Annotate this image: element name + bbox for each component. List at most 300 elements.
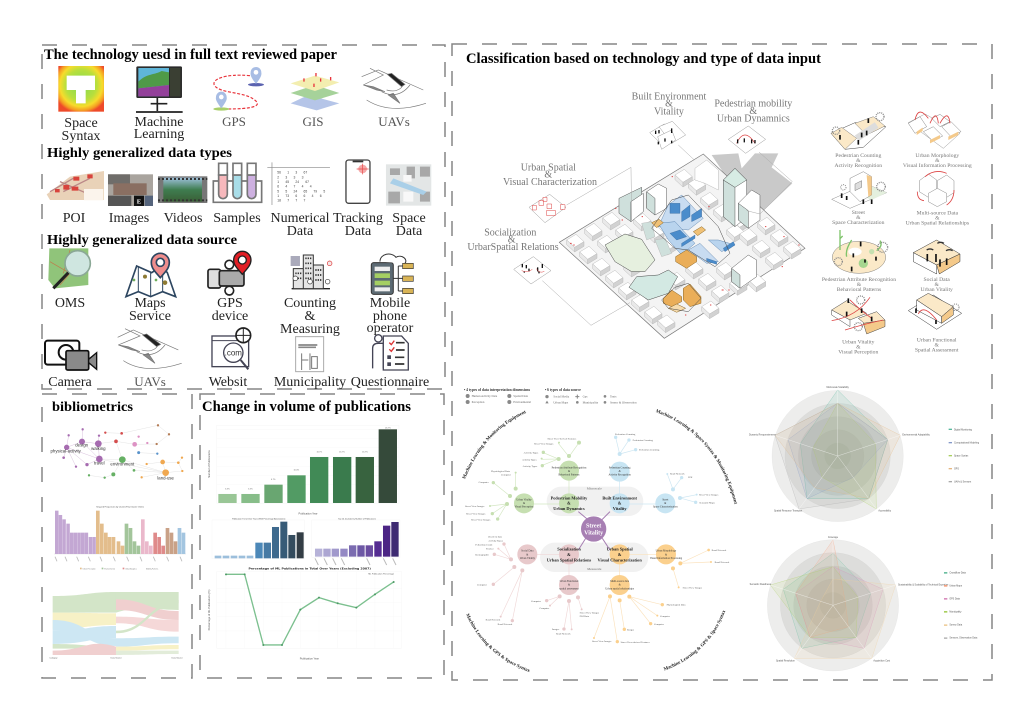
node labels: & [619,584,622,587]
legend: Human Activity Data [472,394,498,398]
labels: data types: Numerical [270,211,330,226]
labels: technology: Syntax [62,129,100,144]
icon: website [212,328,251,369]
radar legend: Space Syntax [954,454,969,457]
radar legend: Urban Maps [949,585,963,588]
panel: classification [452,44,992,680]
radar polygons [775,390,900,509]
labels: data source: OMS [55,296,85,311]
node labels: & [568,584,571,587]
leaf labels: Pedestrian Counting [639,449,660,452]
label: Multi-source Data [917,211,958,217]
label: & [935,158,940,164]
vignette: urban vitality [832,296,885,334]
icon: GPS device [208,251,251,295]
green nodes [489,441,581,521]
mesoscale band [540,543,648,572]
leaf labels: Pedestrian Counting [633,439,654,442]
legend: Environmental [513,400,531,404]
radar legend: Survey Data [949,624,963,627]
node labels: Urban Vitality [520,557,536,560]
chart: ML publications percentage line [207,566,402,660]
vignette: multi-source [917,171,954,207]
radar legend: Computational Modeling [954,441,980,444]
radar labels: Dynamic Responsiveness [749,434,777,436]
chart: sankey diagram [49,592,184,659]
node labels: & [526,553,529,556]
labels: data types: Data [396,224,423,239]
chart: publication trend percentages: Publication Trend Over Years (With Percentage Annotations) [232,517,286,520]
leaf labels: Demographic [475,553,490,556]
chart: keyword frequency bars: Urban Perception [83,567,96,570]
node labels: & [665,553,668,556]
node labels: Street [662,498,669,501]
node labels: & [523,502,526,505]
label: Social Data [924,277,950,283]
icon: numerical table: 6 4 7 4 4 [277,185,312,189]
leaf labels: Road Network [498,623,513,626]
node labels: Built Environment [602,495,638,500]
labels: data source: GPS [217,296,243,311]
arc label: GPS right: Machine Learning & GPS & Space Syntax [663,610,726,670]
inset diamond: urban spatial [529,194,566,223]
leaf labels: Road Network [556,632,571,635]
label: Activity Recognition [835,163,882,169]
leaf labels [475,535,730,644]
vignette: pedestrian counting [831,113,886,149]
radar labels: Semantic Readiness [750,583,772,586]
panel: bibliometrics [42,394,192,678]
heading: technology: The technology uesd in full text reviewed paper [44,47,337,63]
heading: classification: Classification based on technology and type of data input [466,51,821,67]
leaf labels: Physiological Data [491,470,511,473]
label: Pedestrian Attribute Recognition [822,277,896,283]
vignette: pedestrian attribute [832,230,888,273]
label: urban spatial: Visual Characterization [503,177,597,188]
label [903,153,972,169]
data type icons [47,160,431,206]
node labels: Pedestrian Mobility [551,495,588,500]
label: & [934,343,939,349]
data source icons [45,248,413,372]
street vitality centre [581,516,606,542]
labels: data source: Camera [48,375,93,390]
legend: Gps [583,394,588,398]
towers [619,160,760,288]
inset diamond: socialization [514,257,551,284]
label: & [857,282,862,288]
label: & [935,216,940,222]
park [605,234,655,272]
leaf labels: Check-in data [488,535,503,538]
labels: data source: Websit [209,375,247,390]
label: Visual Information Processing [903,162,972,169]
label [906,211,969,227]
leaf labels: Activity Types [524,452,538,455]
leaf labels: Computer [531,600,541,603]
labels: data source: Municipality [274,375,346,390]
chart: keyword network: travel [94,461,105,466]
chart: keyword frequency bars: Environmental [104,567,116,570]
node labels: Vitality [613,506,627,511]
chart: sankey diagram: Data Source [172,656,184,659]
isometric city map [467,91,805,338]
map base plane [559,154,805,338]
heading: data source: Highly generalized data source [47,233,237,248]
icon: questionnaire person [373,335,408,370]
icon: sample tubes [213,163,262,202]
label: & [856,344,861,350]
heading: change in volume of publications: Change in volume of publications [202,399,411,415]
leaf labels: Street View Images [592,640,611,643]
chart: ML publications percentage line: Publication Year [300,656,319,660]
chart: keyword network: physical-activity [51,449,82,454]
street vitality centre: Street [586,523,601,529]
leaf labels: Activity Types [522,458,537,461]
legend: • 6 types of data source [545,388,581,392]
pink and orange links [493,538,711,642]
arc label: monitoring equipment: Machine Learning & Monitoring Equipment [462,410,526,480]
orange buildings [652,219,706,312]
heading: bibliometrics: bibliometrics [52,400,134,415]
chart: publications per year: 16.7% [339,451,345,453]
leaf labels: Pedestrian Count [475,544,493,547]
radar labels: Coverage [828,536,839,539]
teal cluster [629,270,678,300]
radar labels: Environmental Adaptability [902,433,931,436]
leaf labels: Computer [660,615,670,618]
icon: UAV drone [362,68,426,108]
chart: keyword frequency bars: Mobility Patterns [146,567,158,570]
vignette: urban morphology [908,112,961,148]
legend [464,388,637,404]
icon: machine learning [136,66,183,112]
node labels: Pedestrian Attribute Recognition [552,466,587,469]
chart: publication trend percentages [212,517,305,559]
label: pedestrian mobility: & [749,106,757,117]
label [822,277,896,293]
node labels: Space Characterization [653,506,678,509]
leaf labels: Computer [654,623,664,626]
chart: keyword network: walking [91,446,106,451]
radar legend: Municipality [949,611,962,614]
radar legend: UAVs & Sensors [954,480,972,483]
chart: ML publications percentage line: ML Publication Percentage [368,573,395,576]
vignette: urban functional [908,293,962,329]
icon: numerical table: 1 73 6 6 4 6 [277,194,322,198]
node labels: Socialization [557,547,581,552]
radar legend [944,572,978,640]
chart: publications per year: Number of Publications [207,450,211,478]
chart: publications per year: 10.0% [294,470,299,472]
leaf labels [465,433,718,521]
leaf labels: Street View Images [471,518,490,521]
radar axes [770,540,896,659]
icon: OSM magnifier [48,248,90,288]
legend: • 4 types of data interpretation dimensions [464,388,531,392]
label: Space Characterization [832,220,885,226]
street vitality centre: Vitality [584,531,603,537]
heading: data types: Highly generalized data types [47,146,233,161]
label: Urban Vitality [920,287,953,293]
label: pedestrian mobility: Urban Dynamnics [717,113,790,124]
label: Urban Vitality [842,339,875,345]
icon: space data [386,164,431,206]
labels: data source: operator [367,321,414,336]
radar legend [949,428,980,483]
icon: POI map [47,171,104,200]
icon: numerical table: 2 3 3 3 [277,175,304,179]
icon: mobile phone operator [371,254,413,294]
label [838,339,879,355]
leaf labels: Pedestrian Counting [615,433,636,436]
node labels: Visual Perception [515,506,534,509]
chart: keyword frequency bars: Urban Analytics [125,567,137,570]
label: socialization: Socialization [484,227,536,238]
node labels: Urban Dynamics [553,506,585,511]
chart: ML publications percentage line: Percentage of ML Publications (%) [207,589,211,630]
chart: keyword frequency bars: Keyword Frequencies by Cluster (Final Cluster Order) [96,506,144,509]
chart: keyword frequency bars [54,506,186,570]
leaf labels: Road Network [486,619,501,622]
radar labels: Spatial Resolution [776,659,795,662]
panel: technology and data overview [42,45,445,389]
chart: publications per year [207,425,399,515]
node labels: & [664,502,667,505]
labels: data source: Measuring [280,322,340,337]
label: Urban Functional [917,338,957,344]
labels: technology: Machine [135,115,183,130]
icon: website: .com [225,348,242,357]
surrounding buildings [567,169,801,333]
label: Pedestrian Counting [835,153,882,159]
district outlines [652,195,730,267]
label: & [934,282,939,288]
mind map: bottom half [466,516,730,672]
chart: keyword network: land-use [157,475,175,480]
node labels: & [568,470,571,473]
radar labels [750,536,949,662]
icon: numerical table: 56 1 3 67 [277,170,307,174]
node labels: Visual Characterization [598,557,642,562]
labels: data types: Samples [213,211,261,226]
labels: data source: Service [129,309,171,324]
legend: Sensor & Observation [610,400,637,404]
labels: data types [63,211,426,239]
node labels: & [567,552,571,557]
node labels: Urban Spatial [607,547,633,552]
node labels [515,466,678,511]
leaf labels: Road Network [712,549,727,552]
labels: data types: Space [392,211,426,226]
radar legend: Crowdflow Data [949,572,966,575]
orange nodes [593,544,712,643]
labels: data types: Images [109,211,149,226]
legend: Social Media [553,395,570,399]
radar legend: Digital Monitoring [954,428,973,431]
bibliometrics charts [49,424,186,659]
label [915,338,959,354]
chart: keyword network [51,424,183,480]
node labels: Visual Information Processing [650,557,683,560]
leader lines [542,145,792,325]
label: built environment: & [665,99,673,110]
labels: data source: Mobile [370,296,410,311]
radar legend: GPS Data [949,598,960,601]
publication charts [207,425,402,660]
label: urban spatial: & [544,170,552,181]
labels: data source: Maps [134,296,166,311]
label: pedestrian mobility: Pedestrian mobility [714,99,792,110]
label: socialization: UrbarSpatial Relations [467,242,559,253]
label: Street [852,210,865,216]
radar labels: Spatial Resource Transport [774,509,803,512]
radar labels: Multi-scale Scalability [827,386,850,389]
icon: camera and video camera [45,341,97,370]
label: Visual Perception [838,349,879,355]
icon: video strip [158,176,207,203]
label: Spatial Assessment [915,348,959,354]
leaf labels: Street View Images [534,443,553,446]
node labels: & [619,470,622,473]
labels: data source: Counting [284,296,336,311]
mind map: top half [462,388,738,521]
node labels: Multi-source data [610,580,630,583]
chart: publications per year: 16.7% [362,451,368,453]
leaf labels: Computer [539,607,549,610]
radar legend: GPS [954,468,959,470]
labels: technology: Learning [134,127,184,142]
node labels: Urban Vitality [516,498,532,501]
label: socialization: & [508,235,516,246]
leaf labels: Street View Images [465,505,484,508]
leaf labels: Street View Images [580,611,599,614]
labels: technology [62,114,410,144]
icon: gis layers [291,73,339,110]
arc label: space syntax monitoring: Machine Learning & Space Syntax & Monitoring Equipment [656,409,738,504]
icon: counting sensors city [291,255,332,289]
node labels: & [618,552,622,557]
labels: data source: UAVs [134,374,166,389]
icon: maps service [126,253,176,297]
node labels: Mesoscale [587,567,602,571]
leaf labels: Computer [479,481,489,484]
icon: space syntax [58,66,104,112]
labels: data source [48,296,429,390]
legend: Spatial Data [513,394,529,398]
icon: street image collage [108,174,153,206]
label: built environment: Built Environment [632,91,707,102]
radar rings [772,390,903,522]
label: Urban Spatial Relationships [906,221,969,227]
icon: numerical table: 18 7 7 7 [277,199,305,203]
label: urban spatial: Urban Spatial [521,162,576,173]
node labels: Urban Morphology [656,550,677,553]
labels: data source: device [212,309,248,324]
legend: Texts [610,394,617,398]
leaf labels: POI Data [580,615,590,618]
chart: publications per year: 3.3% [225,488,230,490]
label [832,210,885,226]
legend: Municipality [583,400,599,404]
labels: data types: Data [345,224,372,239]
green and blue links [490,437,697,520]
labels: technology: GIS [303,114,323,129]
chart: sankey diagram: Category [49,656,57,659]
label: & [856,215,861,221]
right vignette diagrams [822,112,972,355]
labels: data types: POI [63,211,86,226]
radar rings [767,540,899,671]
shadows [712,153,792,223]
label: Urban Morphology [915,153,959,159]
leaf labels: Activity Types [488,539,503,542]
radar labels: Acquisition Cost [873,659,890,662]
leaf labels: Road Network [670,472,685,475]
label: Behavioral Patterns [837,287,881,293]
leaf labels: Computer [477,584,487,587]
leaf labels: Street View Images [683,586,702,589]
icon: street image collage: E [137,199,142,206]
leaf labels: POI [688,476,692,479]
leaf labels: Street View-derived Features [621,641,650,644]
arc label: GPS left: Machine Learning & GPS & Space Syntax [466,613,530,672]
node labels: Social Data [521,550,534,553]
leaf labels: Semantic Maps [699,501,715,504]
labels: technology: UAVs [378,114,410,129]
red markers [570,177,800,315]
legend: Urban Maps [553,400,569,404]
blue nodes [610,436,698,513]
chart: ML publications percentage line: Percentage of ML Publications in Total Over Years (Excluding 2007) [248,566,371,570]
label: pedestrian mobility [714,99,792,124]
node labels: Pedestrian Counting [609,466,631,469]
radar labels: Accessibility [878,509,892,512]
icon: numerical table: 5 5 24 65 79 5 [277,189,325,193]
labels: data types: Data [287,224,314,239]
label: built environment [632,91,707,117]
chart: publications per year: 6.7% [271,479,276,481]
label [920,277,953,293]
chart: publications per year: Publication Year [298,511,318,515]
labels: data types: Tracking [333,211,383,226]
node labels: Microscale [587,486,602,490]
leaf labels: Street View Images [466,513,485,516]
node labels: spatial assessment [559,587,579,590]
inset diamond: pedestrian mobility [728,126,766,153]
label [835,153,882,169]
radar axes [775,390,900,509]
radar legend: Sensors, Observation Data [949,637,978,640]
node labels: & [618,500,622,505]
chart: keyword network: environment [110,462,135,467]
chart: publications per year: 26.7% [385,428,391,430]
pink nodes [492,542,583,631]
label: & [856,158,861,164]
radar polygons [770,540,896,659]
radar chart: data sources [750,536,978,671]
labels: data source: phone [373,309,407,324]
labels: technology: Space [64,116,98,131]
labels: data source: Questionnaire [351,375,429,390]
node labels: Urban Functional [560,580,579,583]
node labels [520,547,683,590]
vignette: street [832,172,887,208]
chart: top journals [312,517,400,565]
chart: publications per year: 16.7% [317,451,322,453]
leaf labels: Images [627,628,634,631]
label: urban spatial [503,162,597,188]
